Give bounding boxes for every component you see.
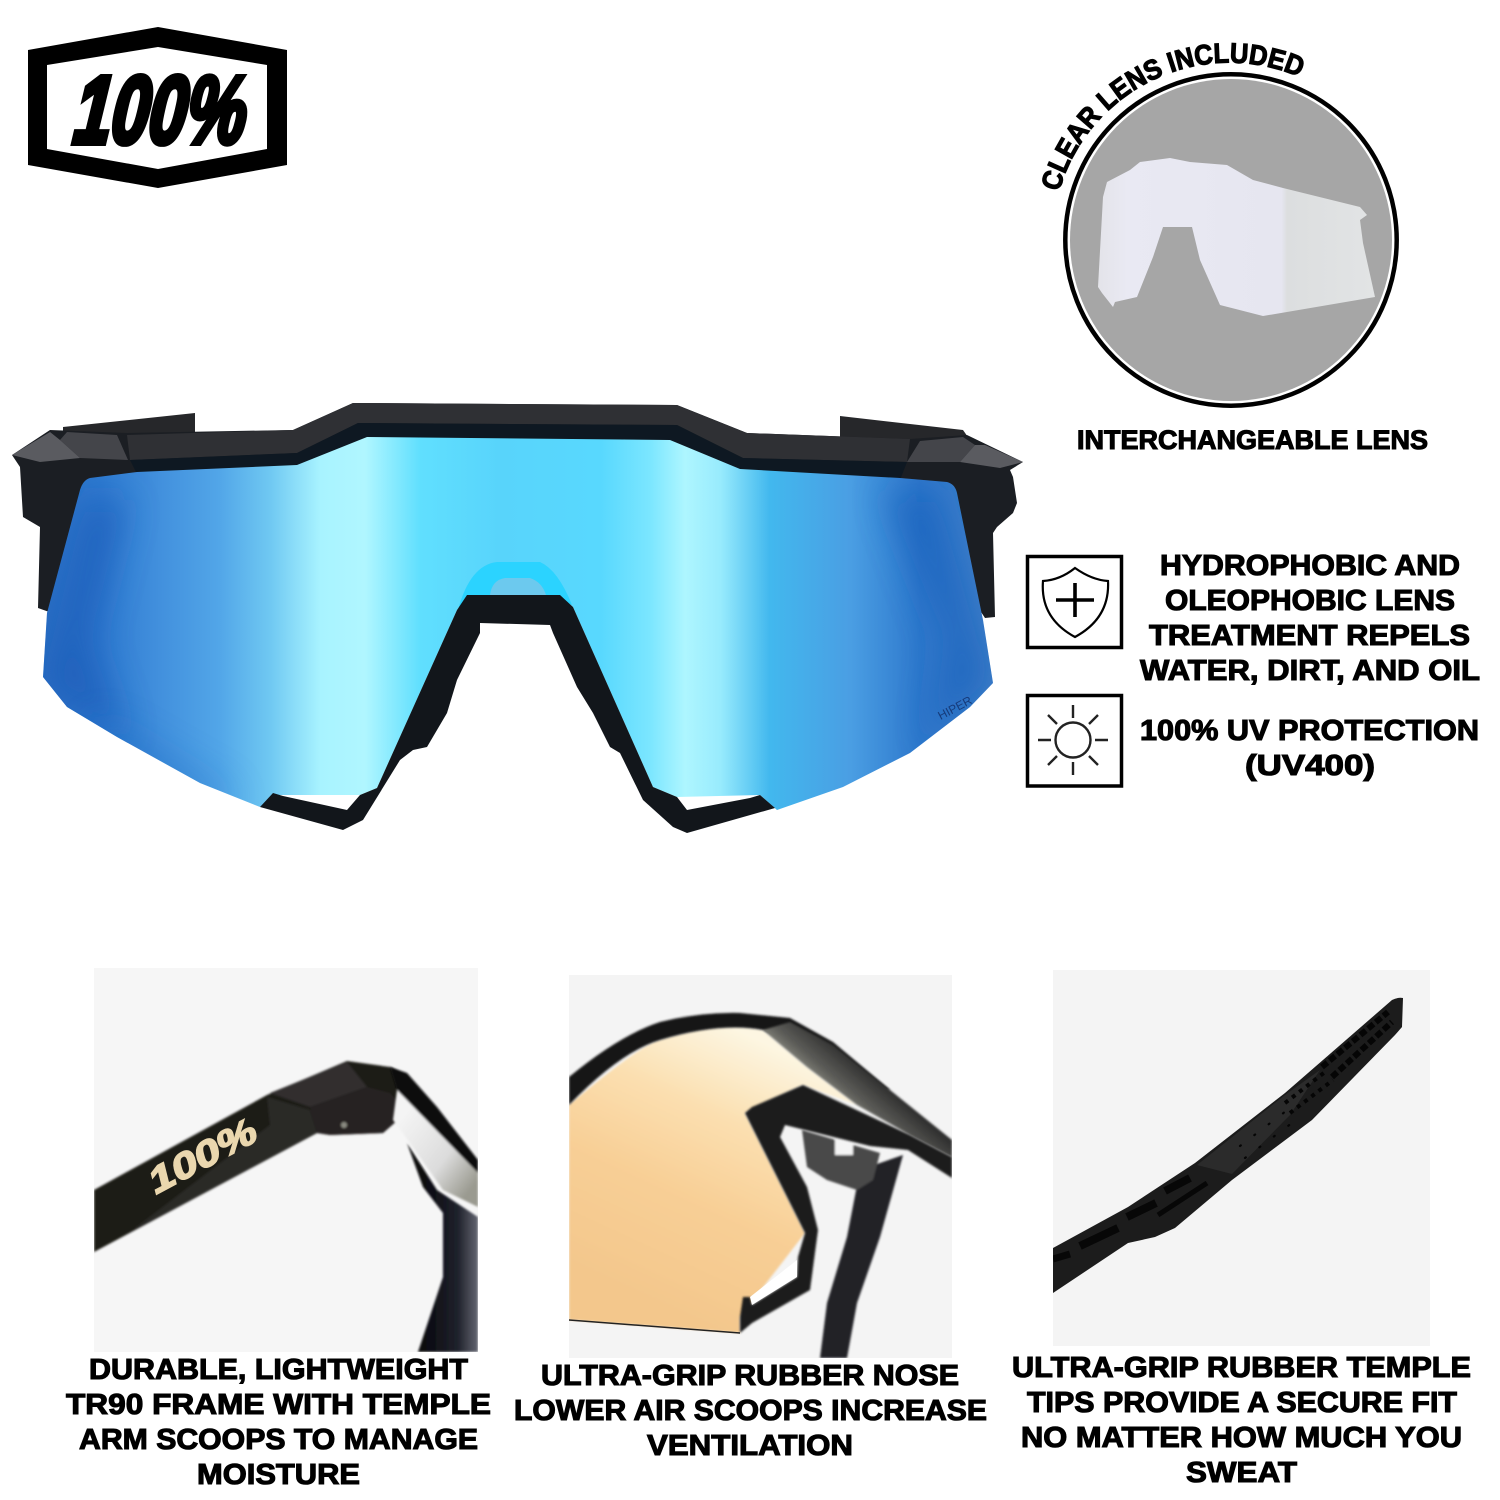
text: 100% UV protection xyxy=(1140,715,1479,782)
text: 100% UV protection: (UV400) xyxy=(1245,750,1375,782)
text: hydrophobic and oleophobic: HYDROPHOBIC AND xyxy=(1160,550,1460,582)
black rim xyxy=(569,1013,890,1105)
icon: shield with plus xyxy=(1028,556,1122,648)
caption: nose: ULTRA-GRIP RUBBER NOSE xyxy=(541,1360,959,1392)
caption: nose: VENTILATION xyxy=(647,1430,853,1462)
curved label: clear lens included: CLEAR LENS INCLUDED xyxy=(1042,42,1304,190)
panel: nose piece detail photo xyxy=(569,975,952,1358)
panel: frame detail photo xyxy=(94,968,478,1352)
logo: 100% hexagon badge xyxy=(28,27,287,188)
panel: temple tip detail photo xyxy=(1053,970,1430,1346)
caption: frame xyxy=(66,1354,491,1491)
nose piece and bridge xyxy=(260,595,775,833)
text: hydrophobic and oleophobic: TREATMENT REPELS xyxy=(1149,620,1470,652)
nose arch reflection xyxy=(458,562,572,610)
temple tips behind frame xyxy=(63,413,970,440)
lens edge: reflection and black rim xyxy=(390,1067,478,1352)
caption: nose xyxy=(514,1360,987,1462)
text: hydrophobic and oleophobic: WATER, DIRT, AND OIL xyxy=(1140,655,1480,687)
slots xyxy=(1053,1178,1207,1259)
caption: temple tips: ULTRA-GRIP RUBBER TEMPLE xyxy=(1012,1352,1471,1384)
grey temple arm band xyxy=(763,1022,952,1157)
caption: temple tips xyxy=(1012,1352,1471,1489)
right brow end cap xyxy=(907,437,1023,468)
frame upper brow band xyxy=(127,403,910,462)
temple stalk and rubber pad xyxy=(802,1130,903,1358)
main product: blue mirror sunglasses xyxy=(12,403,1023,833)
smooth grip panel xyxy=(1197,1070,1320,1174)
feature: lens treatment xyxy=(1028,550,1480,687)
air scoop gap xyxy=(750,1260,797,1305)
circle ring and grey backing xyxy=(1065,74,1397,406)
temple arm and hinge xyxy=(94,1061,407,1252)
caption: frame: DURABLE, LIGHTWEIGHT xyxy=(89,1354,468,1386)
rubber temple tip xyxy=(1053,998,1403,1293)
clear lens shape xyxy=(1098,158,1375,316)
caption: temple tips: NO MATTER HOW MUCH YOU xyxy=(1021,1422,1462,1454)
nose frame section xyxy=(740,1085,952,1333)
lens bottom edge line xyxy=(569,1320,740,1333)
caption: temple tips: SWEAT xyxy=(1186,1457,1297,1489)
arm logo: 100%: 100% xyxy=(141,1110,264,1201)
left brow end cap xyxy=(12,432,128,462)
frame silhouette xyxy=(12,403,1023,618)
grip dots and honeycomb xyxy=(1240,1012,1392,1158)
logo: 100% hexagon badge: 100% xyxy=(70,57,253,164)
caption: frame: TR90 FRAME WITH TEMPLE xyxy=(66,1389,491,1421)
frame dark underside strip xyxy=(130,423,907,480)
gold lens xyxy=(569,1027,857,1333)
caption: frame: ARM SCOOPS TO MANAGE xyxy=(79,1424,478,1456)
icon: sun xyxy=(1028,696,1122,786)
text: hydrophobic and oleophobic: OLEOPHOBIC LENS xyxy=(1165,585,1455,617)
caption: nose: LOWER AIR SCOOPS INCREASE xyxy=(514,1395,987,1427)
caption: temple tips: TIPS PROVIDE A SECURE FIT xyxy=(1027,1387,1457,1419)
lens mark: HIPER: HIPER xyxy=(936,693,975,723)
mirrored blue lens xyxy=(30,430,1005,820)
caption: interchangeable lens: INTERCHANGEABLE LENS xyxy=(1077,425,1428,455)
feature: UV protection xyxy=(1028,696,1479,786)
text: hydrophobic and oleophobic xyxy=(1140,550,1480,687)
panel: clear lens circle xyxy=(1042,42,1399,408)
caption: frame: MOISTURE xyxy=(197,1459,360,1491)
text: 100% UV protection: 100% UV PROTECTION xyxy=(1140,715,1479,747)
